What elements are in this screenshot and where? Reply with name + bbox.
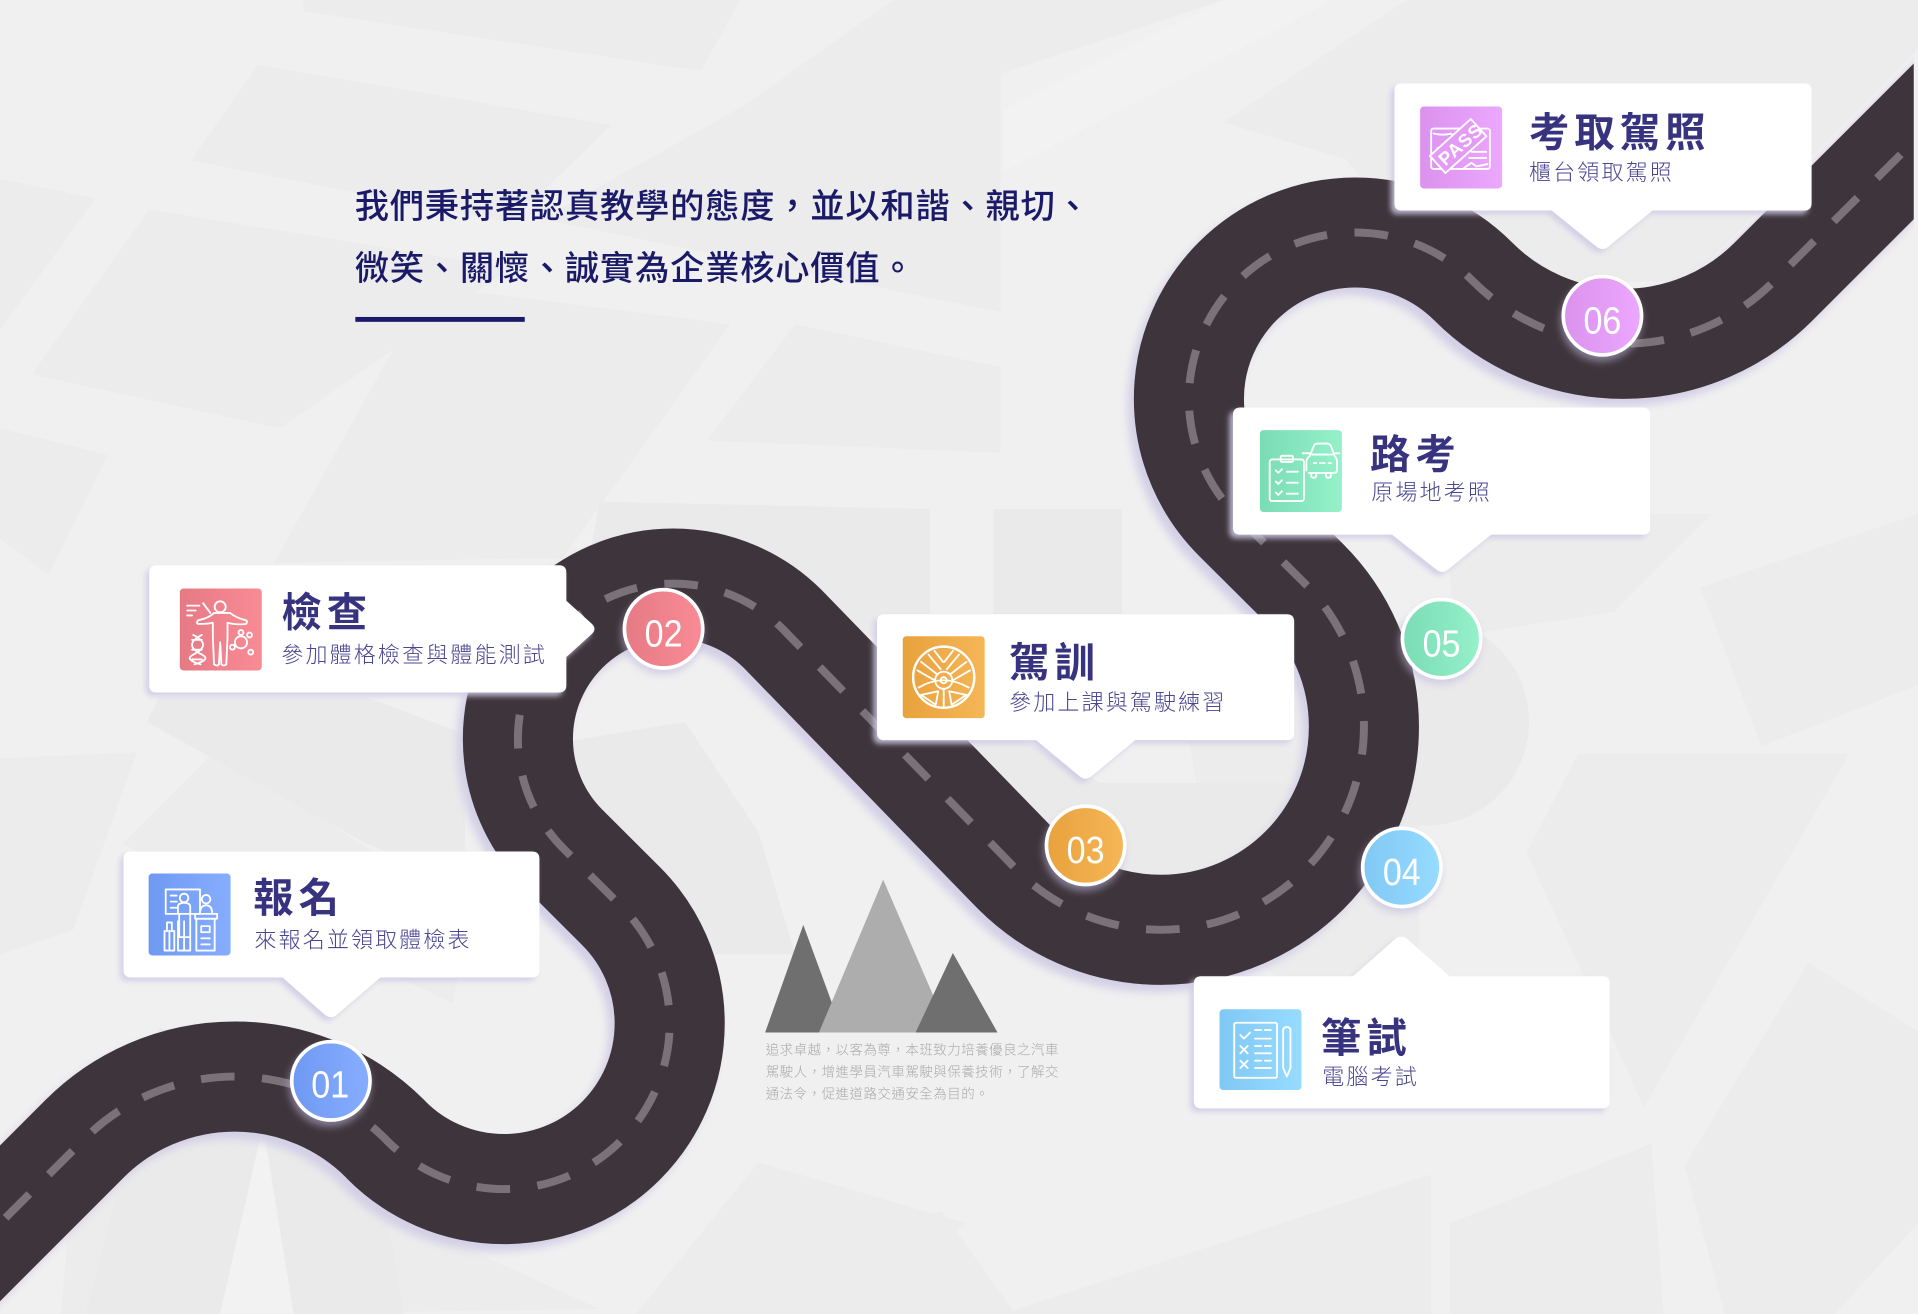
title: 駕訓 [1009, 640, 1100, 686]
step 04 card: 筆試 [1194, 937, 1610, 1108]
subtitle: 櫃台領取駕照 [1529, 160, 1674, 185]
badge 06: 06 [1583, 300, 1621, 342]
description text: 追求卓越，以客為尊，本班致力培養優良之汽車 [766, 1043, 1059, 1058]
step 06 card: 考取駕照 [1394, 83, 1812, 249]
badge 02 [624, 590, 703, 668]
badge 04 [1363, 828, 1441, 907]
step 05 card: 路考 [1233, 407, 1650, 572]
title: 檢查 [281, 589, 372, 635]
mountains illustration [765, 880, 998, 1033]
description text: 通法令，促進道路交通安全為目的。 [766, 1087, 989, 1102]
badge 04: 04 [1383, 852, 1421, 894]
badge 03 [1046, 806, 1125, 885]
step 03 card: 駕訓 [877, 614, 1294, 779]
heading text [355, 188, 1091, 322]
description text [766, 1043, 1059, 1102]
icon: road test clipboard and car [1260, 430, 1342, 512]
icon: pass ticket [1420, 107, 1502, 189]
heading text: 我們秉持著認真教學的態度，並以和諧、親切、 [355, 188, 1091, 226]
icon: pass ticket: PASS [1434, 119, 1487, 170]
icon: body check [180, 588, 262, 670]
icon: registration desk [149, 874, 231, 955]
subtitle: 原場地考照 [1371, 480, 1492, 505]
badge 06 [1563, 277, 1642, 355]
heading text: 微笑、關懷、誠實為企業核心價值。 [355, 250, 915, 288]
subtitle: 電腦考試 [1322, 1065, 1419, 1090]
subtitle: 參加體格檢查與體能測試 [281, 643, 547, 668]
badge 05 [1402, 600, 1481, 678]
step 01 card: 報名 [124, 851, 539, 1017]
subtitle: 參加上課與駕駛練習 [1009, 690, 1226, 715]
heading underline [355, 317, 525, 322]
badge 01: 01 [311, 1064, 349, 1106]
icon: exam paper [1220, 1009, 1302, 1090]
title: 考取駕照 [1529, 109, 1711, 155]
description text: 駕駛人，增進學員汽車駕駛與保養技術，了解交 [766, 1065, 1059, 1080]
badge 05: 05 [1423, 623, 1461, 665]
badge 01 [292, 1042, 370, 1120]
badge 03: 03 [1067, 830, 1105, 872]
title: 報名 [253, 875, 344, 921]
subtitle: 來報名並領取體檢表 [254, 928, 472, 953]
badge 02: 02 [645, 614, 683, 656]
icon: steering wheel [903, 636, 985, 718]
title: 路考 [1370, 432, 1461, 478]
title: 筆試 [1321, 1015, 1412, 1061]
step 02 card: 檢查 [149, 565, 594, 692]
